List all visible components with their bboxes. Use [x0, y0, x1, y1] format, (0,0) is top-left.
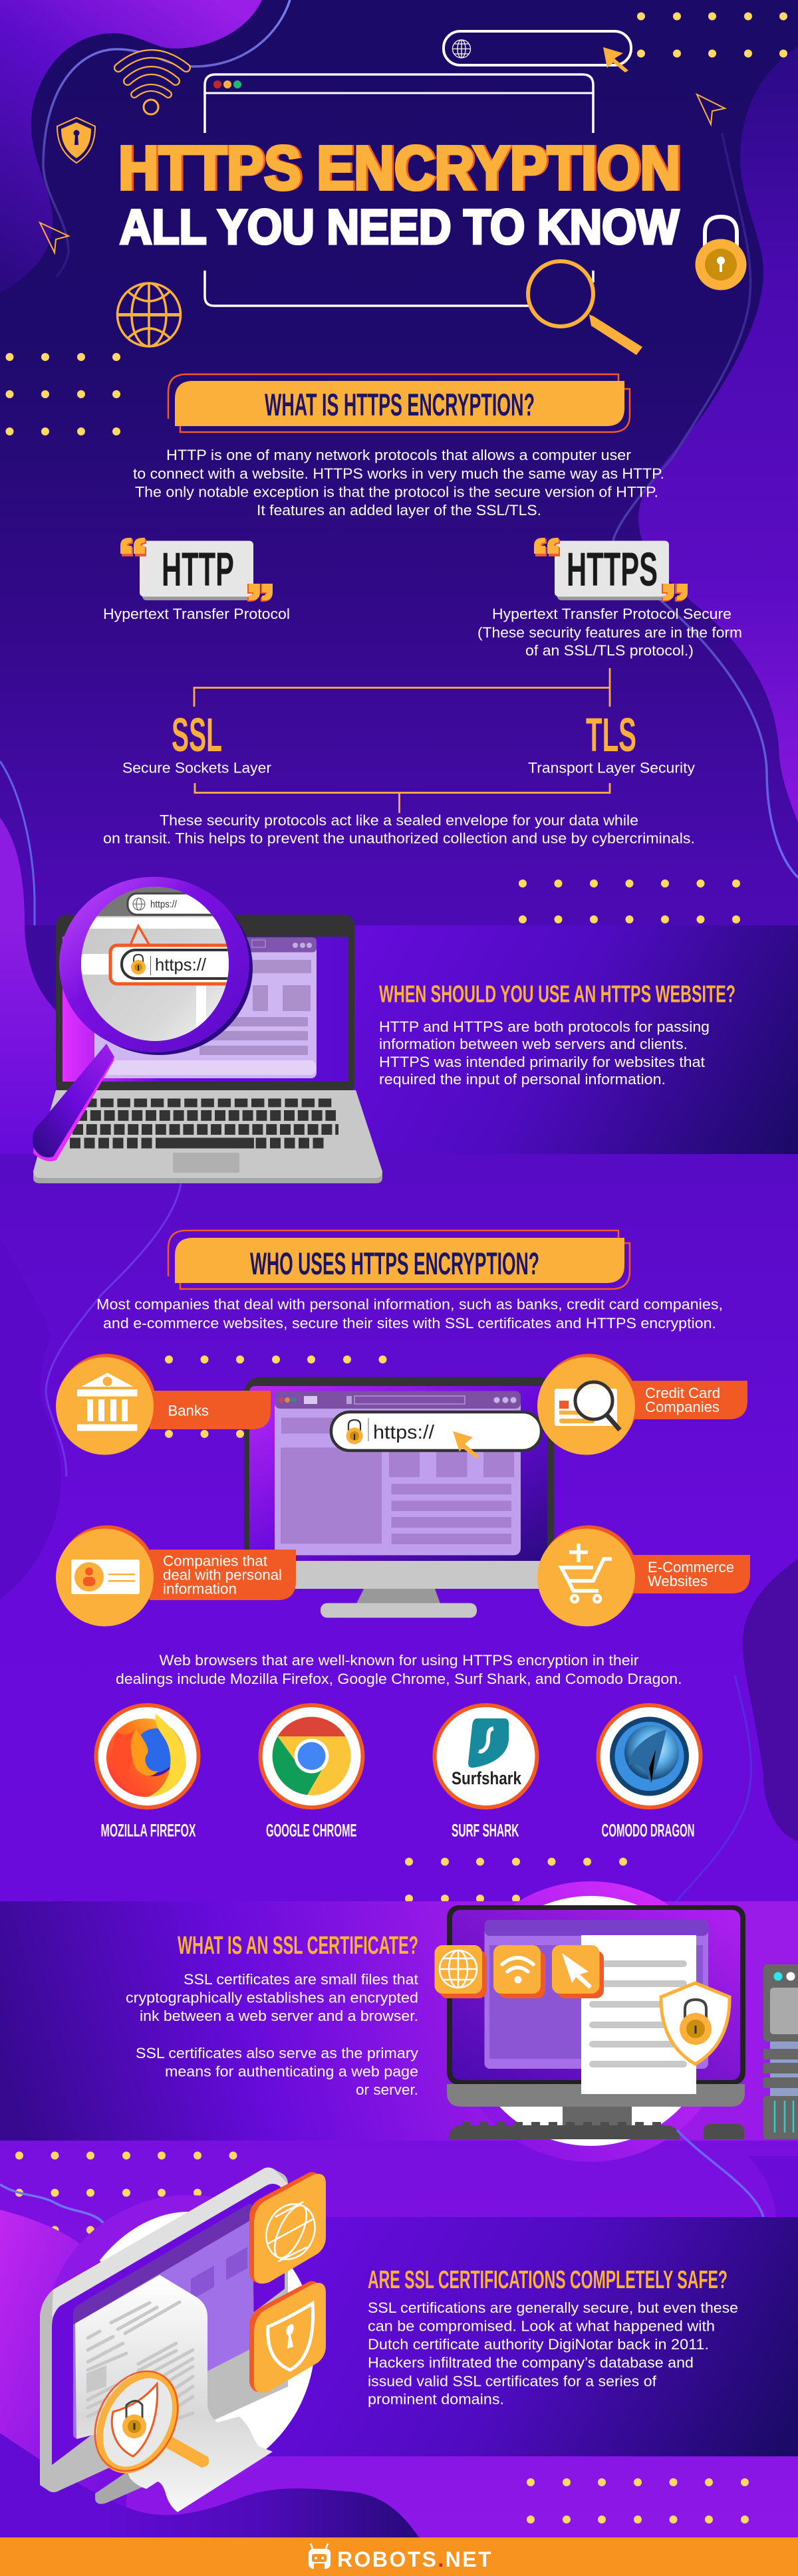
callout: companies handling personal information: deal with personal [163, 1566, 282, 1583]
band body text: HTTPS was intended primarily for websites that [379, 1054, 705, 1070]
ssl text: or server. [356, 2081, 418, 2098]
illustration: white circle behind isometric monitor [100, 2212, 315, 2473]
ssl text [126, 1971, 418, 2098]
illustration: ssl monitor [447, 1905, 745, 2139]
protocol descriptions [103, 606, 742, 659]
title: HTTPS ENCRYPTION [120, 133, 682, 202]
browser: surfshark [435, 1705, 537, 1840]
band body text [379, 1018, 710, 1088]
safe body text: prominent domains. [368, 2391, 504, 2408]
safe body text: SSL certifications are generally secure, but even these [368, 2299, 738, 2316]
intro text [133, 447, 664, 519]
protocol descriptions: Hypertext Transfer Protocol [103, 606, 290, 622]
icon: robot logo [309, 2543, 331, 2569]
ssl text: SSL certificates are small files that [184, 1971, 418, 1988]
band body text: HTTP and HTTPS are both protocols for passing [379, 1018, 710, 1035]
background blobs: lower sections [0, 1183, 798, 2217]
icon: bank [77, 1373, 137, 1431]
illustration: desktop monitor [244, 1377, 554, 1618]
HTTP chip [120, 538, 273, 602]
illustration: server tower [763, 1964, 798, 2139]
who uses text [96, 1296, 723, 1332]
line linking to monitor [677, 2130, 763, 2217]
illustration: top browser frame [205, 74, 593, 306]
safe body text: can be compromised. Look at what happened with [368, 2317, 715, 2335]
intro text: to connect with a website. HTTPS works in very much the same way as HTTP. [133, 465, 664, 482]
icon tile: isometric globe [249, 2172, 326, 2283]
icon: id card [71, 1560, 140, 1594]
who uses text: Most companies that deal with personal information, such as banks, credit card companies, [96, 1296, 723, 1312]
dots around monitor [165, 1355, 387, 1438]
illustration: magnifying glass over address bar [33, 877, 253, 1161]
protocol descriptions: (These security features are in the form [477, 624, 742, 641]
callout: credit card companies: Companies [645, 1399, 720, 1415]
footer bar [0, 2537, 798, 2576]
connector brackets [194, 668, 610, 813]
illustration: laptop [33, 915, 382, 1183]
safe body text: Hackers infiltrated the company’s database and [368, 2355, 694, 2371]
illustration: isometric monitor [40, 2167, 288, 2504]
HTTPS chip [534, 538, 688, 602]
address bar on monitor [331, 1412, 541, 1459]
illustration: paper with text [75, 2275, 273, 2512]
ssl text: cryptographically establishes an encrypted [126, 1989, 418, 2006]
icon tile: cursor [552, 1945, 604, 1998]
SSL and TLS: TLS [586, 709, 636, 762]
callout: credit card companies [537, 1353, 747, 1455]
callout: banks [56, 1353, 271, 1455]
callout: e-commerce websites: E-Commerce [648, 1559, 734, 1576]
intro text: The only notable exception is that the protocol is the secure version of HTTP. [135, 484, 658, 500]
SSL and TLS: Secure Sockets Layer [122, 759, 271, 776]
illustration: magenta circle behind monitor [450, 1881, 731, 2162]
address bar on monitor: https:// [373, 1422, 435, 1443]
browser: mozilla firefox [96, 1705, 198, 1840]
icon: outlined cursors [40, 94, 725, 253]
icon: shopping cart [561, 1544, 612, 1602]
ssl text: SSL certificates also serve as the primary [136, 2045, 418, 2061]
safe body text [368, 2299, 738, 2408]
band body text: required the input of personal information. [379, 1071, 666, 1088]
browser label: SURF SHARK [452, 1820, 519, 1840]
title: ALL YOU NEED TO KNOW [120, 201, 679, 254]
decorative dots [5, 12, 787, 923]
HTTPS chip: HTTPS [567, 544, 658, 596]
protocol descriptions: of an SSL/TLS protocol.) [525, 642, 694, 659]
who uses text: and e-commerce websites, secure their sites with SSL certificates and HTTPS encryption. [103, 1315, 716, 1332]
browsers text: Web browsers that are well-known for using HTTPS encryption in their [160, 1652, 638, 1669]
open quote [534, 538, 560, 556]
icon tile: globe [435, 1945, 487, 1998]
security protocols text: on transit. This helps to prevent the unauthorized collection and use by cybercriminals. [103, 830, 695, 847]
icon: wifi [118, 54, 186, 114]
intro text: HTTP is one of many network protocols that allows a computer user [166, 447, 631, 463]
icon: credit card and magnifier [555, 1382, 620, 1430]
footer bar: ROBOTS.NET [337, 2547, 491, 2571]
safe body text: issued valid SSL certificates for a series of [368, 2373, 657, 2389]
browser: comodo dragon [598, 1705, 701, 1840]
browser label: MOZILLA FIREFOX [101, 1820, 196, 1840]
icon tile: wifi [493, 1945, 545, 1998]
intro text: It features an added layer of the SSL/TLS. [257, 502, 541, 519]
browser label: COMODO DRAGON [601, 1820, 694, 1840]
browser: google chrome [261, 1705, 363, 1840]
safe body text: Dutch certificate authority DigiNotar back in 2011. [368, 2336, 709, 2353]
SSL and TLS: SSL [172, 709, 222, 762]
heading: who uses https encryption [168, 1230, 630, 1289]
close quote [662, 584, 688, 602]
open quote [120, 538, 146, 556]
ssl text: ink between a web server and a browser. [140, 2008, 418, 2024]
security protocols text: These security protocols act like a sealed envelope for your data while [160, 812, 638, 828]
heading: what is https encryption: WHAT IS HTTPS ENCRYPTION? [265, 387, 535, 422]
ssl heading: WHAT IS AN SSL CERTIFICATE? [178, 1932, 418, 1960]
background blobs: top section [0, 0, 798, 925]
dots above ssl panel [405, 1857, 627, 1903]
panel: when should you use an https website [0, 925, 798, 1154]
HTTP chip: HTTP [162, 544, 234, 596]
callout: companies handling personal information: information [163, 1581, 237, 1597]
icon: magnifying glass [528, 261, 642, 355]
dots in safe section [15, 2151, 749, 2523]
illustration: magnifying glass over address bar: https:// [155, 955, 207, 975]
callout: e-commerce websites [537, 1525, 750, 1626]
icon: search bar with cursor [444, 31, 631, 72]
callout: banks: Banks [168, 1403, 209, 1419]
protocol descriptions: Hypertext Transfer Protocol Secure [492, 606, 732, 622]
icon: shield with keyhole [57, 118, 95, 163]
title: HTTPS ENCRYPTION [118, 133, 680, 202]
heading: what is https encryption [168, 374, 630, 432]
close quote [247, 584, 273, 602]
panel: what is an ssl certificate [0, 1901, 798, 2141]
SSL and TLS [122, 709, 695, 776]
browser label: GOOGLE CHROME [266, 1820, 356, 1840]
ssl text: means for authenticating a web page [165, 2063, 418, 2079]
icon tile: isometric shield [249, 2282, 326, 2393]
panel: are ssl certifications completely safe [266, 2217, 798, 2456]
SSL and TLS: Transport Layer Security [528, 759, 695, 776]
callout: companies handling personal information: Companies that [163, 1553, 267, 1569]
heading: who uses https encryption: WHO USES HTTPS ENCRYPTION? [250, 1246, 539, 1281]
callout: e-commerce websites: Websites [648, 1573, 708, 1589]
illustration: magnifying glass over address bar: https:// [150, 899, 178, 910]
band body text: information between web servers and clients. [379, 1036, 688, 1052]
icon: padlock [696, 217, 746, 290]
icon: shield with lock [661, 1983, 730, 2064]
title [118, 133, 682, 254]
browser: surfshark: Surfshark [452, 1768, 522, 1788]
icon: globe [117, 283, 181, 346]
illustration: document [581, 1935, 696, 2094]
browsers text [116, 1652, 682, 1687]
browsers text: dealings include Mozilla Firefox, Google Chrome, Surf Shark, and Comodo Dragon. [116, 1671, 682, 1687]
background: safe section blobs [0, 2184, 419, 2537]
callout: companies handling personal information [56, 1525, 296, 1626]
security protocols text [103, 812, 695, 847]
icon: isometric magnifier with shield [78, 2357, 209, 2485]
callout: credit card companies: Credit Card [645, 1385, 720, 1401]
